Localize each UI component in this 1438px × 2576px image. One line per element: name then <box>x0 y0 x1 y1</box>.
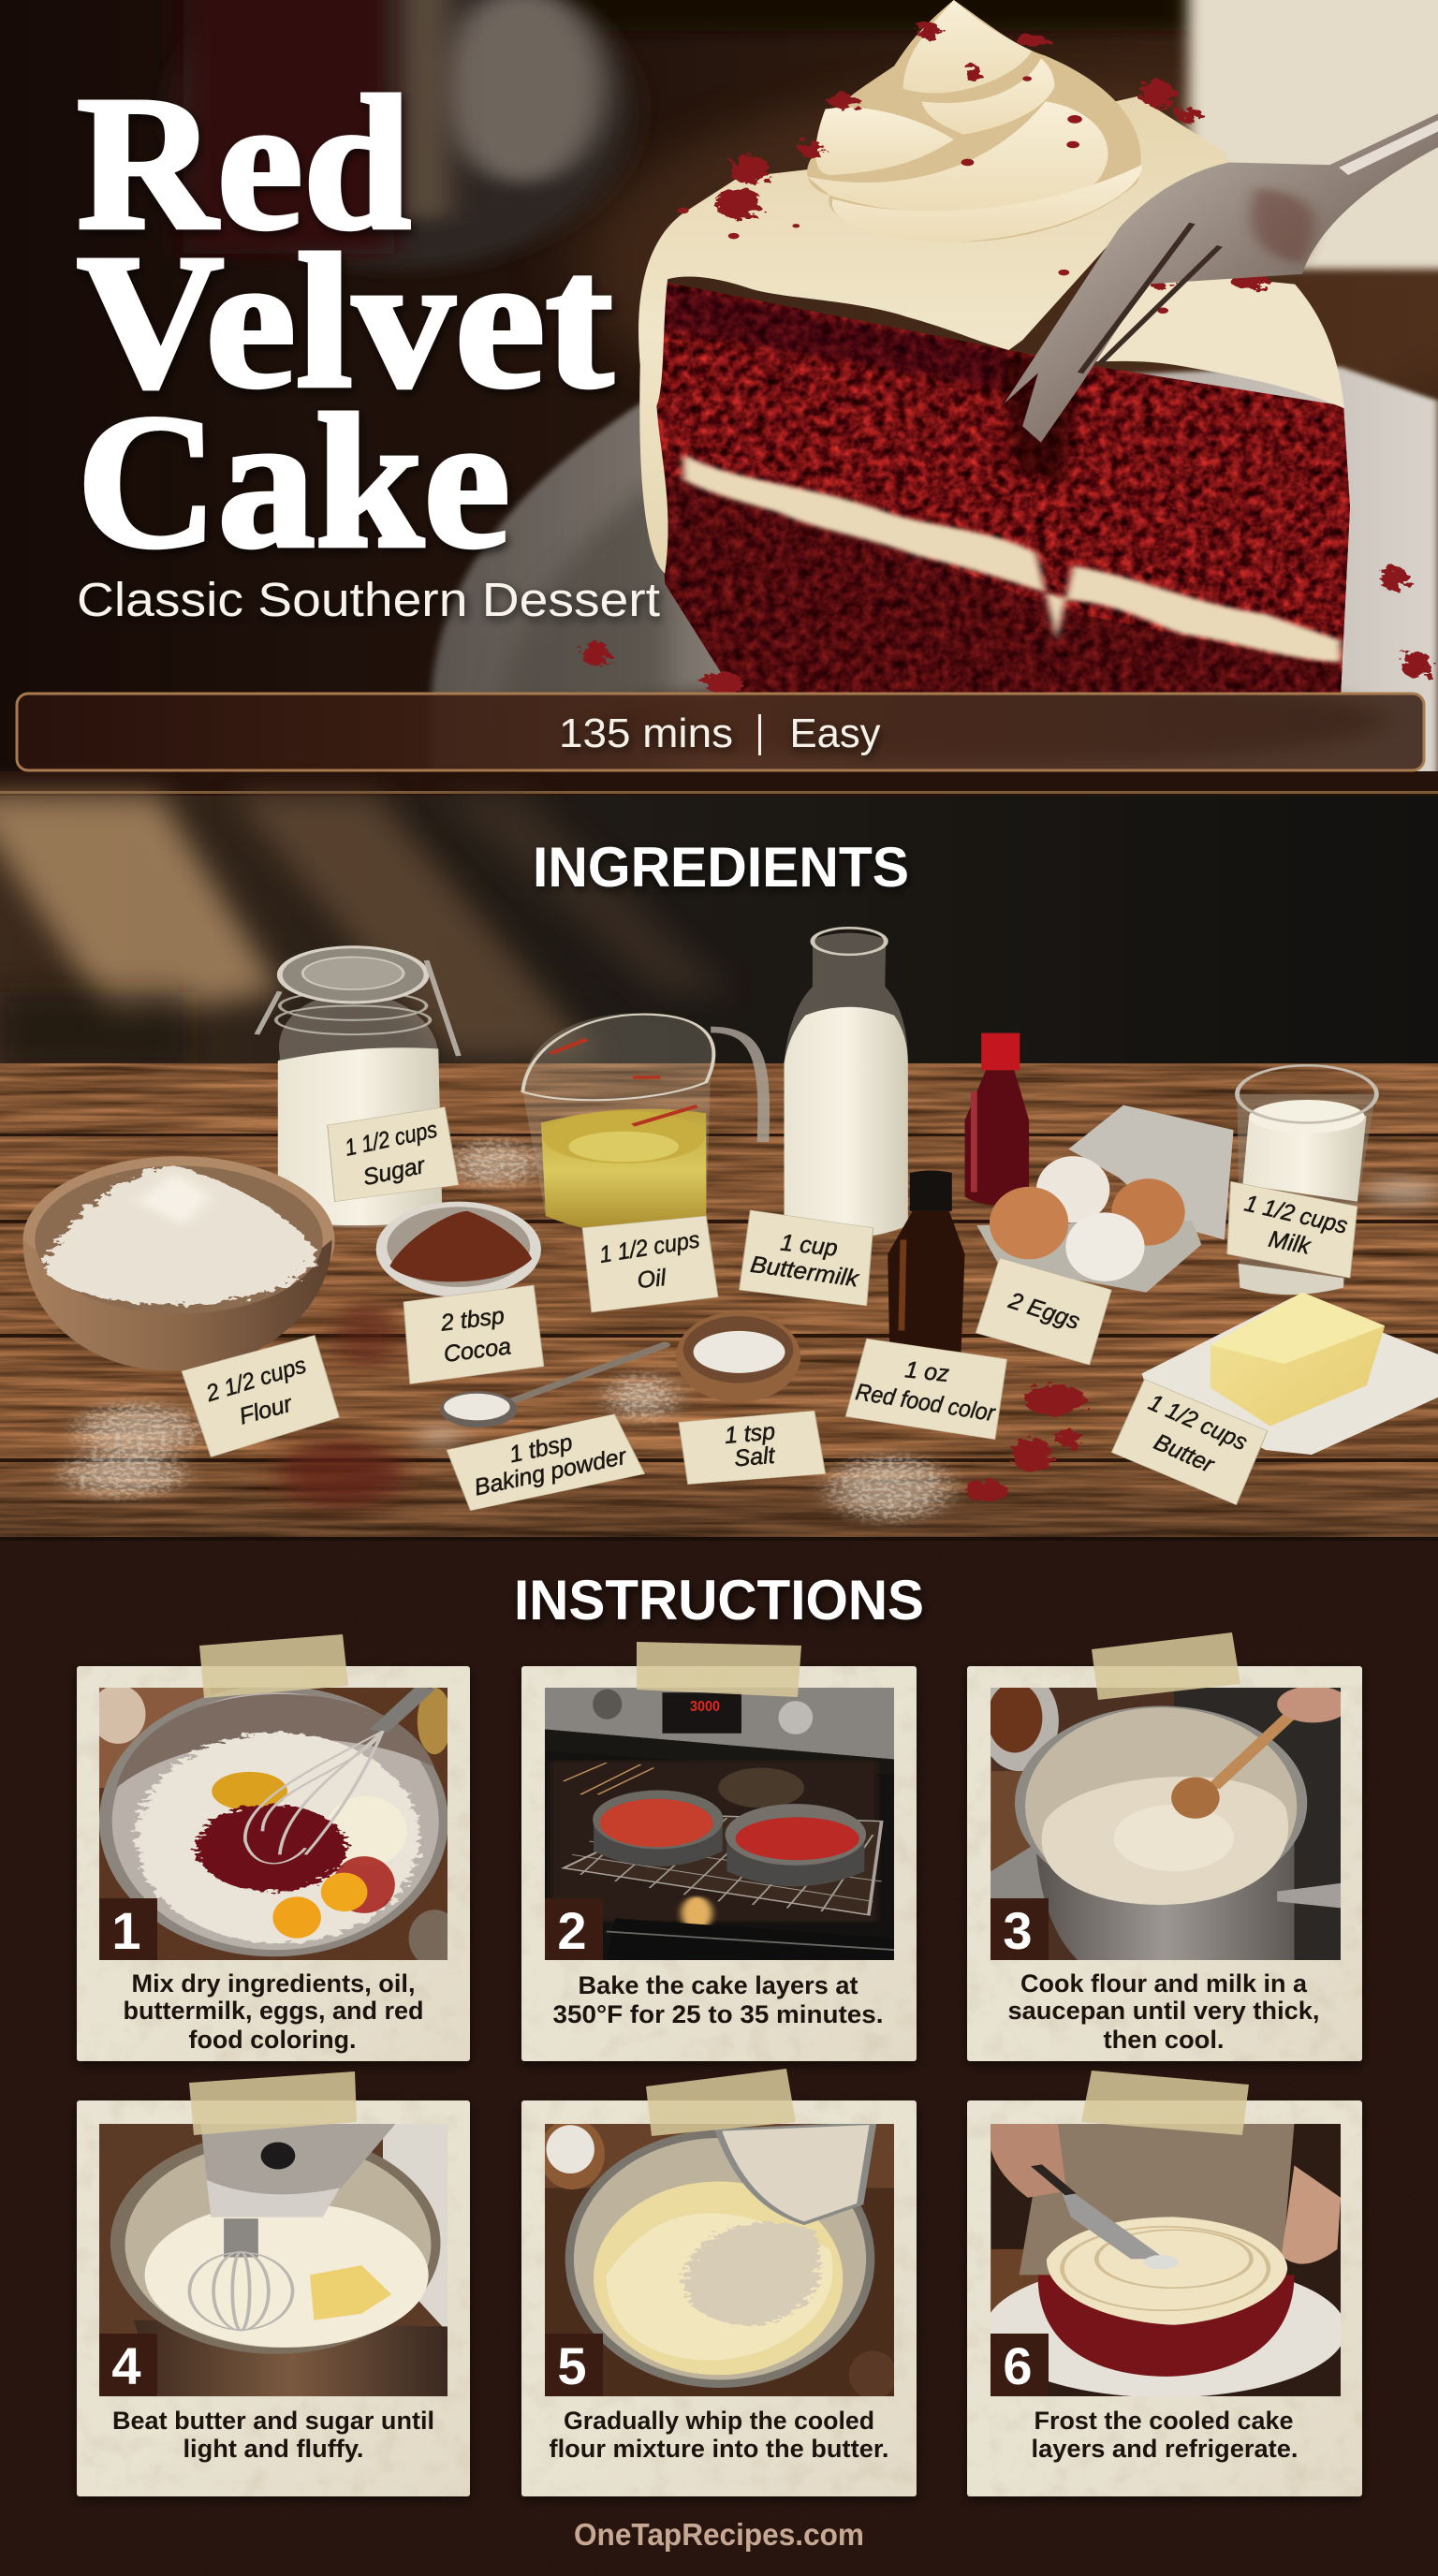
step text: saucepan until very thick, <box>1007 1997 1320 2025</box>
flour bowl <box>22 1156 335 1371</box>
step text <box>1007 1969 1320 2054</box>
egg carton <box>976 1105 1234 1293</box>
spills <box>60 1139 1438 1522</box>
label: oil <box>597 1226 701 1294</box>
step number 4: 4 <box>111 2336 141 2395</box>
frosting <box>638 96 1229 574</box>
step text: flour mixture into the butter. <box>549 2435 889 2463</box>
cocoa bowl <box>376 1202 541 1297</box>
tape <box>637 1642 801 1697</box>
subtitle: Classic Southern Dessert <box>77 573 660 626</box>
hero section <box>0 0 1438 797</box>
label: sugar <box>343 1117 440 1191</box>
label: milk: 1 1/2 cups <box>1242 1190 1350 1239</box>
card paper <box>77 1666 470 2061</box>
info bar: time and difficulty <box>17 694 1424 770</box>
step text: then cool. <box>1103 2026 1225 2054</box>
label: butter: 1 1/2 cups <box>1145 1389 1251 1456</box>
card paper <box>77 2100 470 2496</box>
photo: stand mixer <box>99 2124 448 2397</box>
step text: light and fluffy. <box>183 2435 363 2463</box>
step number 2 <box>545 1898 603 1960</box>
instructions heading: INSTRUCTIONS <box>514 1569 924 1632</box>
step 5 <box>521 2069 917 2496</box>
crumbs <box>581 22 1433 693</box>
photo: folding in flour <box>539 2118 897 2399</box>
label: red food color: Red food color <box>854 1379 998 1427</box>
step number 3: 3 <box>1003 1901 1033 1960</box>
step number 6 <box>990 2334 1049 2396</box>
label: red food color <box>854 1356 998 1427</box>
sugar jar <box>257 947 459 1228</box>
tape <box>1081 2071 1249 2135</box>
ingredient props <box>22 928 1438 1522</box>
step text: Gradually whip the cooled <box>564 2407 874 2435</box>
card paper <box>967 2100 1362 2496</box>
step 1 <box>77 1634 470 2061</box>
measuring cup with oil <box>522 1013 764 1233</box>
card paper <box>967 1666 1362 2061</box>
step text <box>552 1971 884 2028</box>
label: flour: Flour <box>237 1390 296 1430</box>
fork <box>1005 104 1438 443</box>
step text: Bake the cake layers at <box>579 1971 858 1999</box>
instructions section <box>0 1537 1438 2576</box>
step number 2: 2 <box>557 1901 587 1960</box>
spoon <box>440 1345 665 1427</box>
label: baking powder: 1 tbsp <box>506 1429 575 1468</box>
step text: Mix dry ingredients, oil, <box>131 1969 416 1998</box>
tape <box>199 1634 348 1698</box>
step text: Frost the cooled cake <box>1034 2407 1294 2435</box>
ingredients section <box>0 796 1438 1541</box>
step text: buttermilk, eggs, and red <box>124 1997 423 2025</box>
label: cocoa <box>438 1303 512 1368</box>
step text <box>124 1969 423 2054</box>
info bar: time and difficulty: 135 mins <box>559 710 733 756</box>
photo: frosting the cake <box>985 2124 1346 2397</box>
photo: oven <box>545 1688 895 1962</box>
step text: 350°F for 25 to 35 minutes. <box>552 2000 884 2028</box>
recipe title: Red <box>77 57 411 270</box>
step 6 <box>967 2071 1362 2496</box>
label: salt <box>724 1418 777 1471</box>
card paper <box>521 1666 917 2061</box>
milk bottle <box>785 928 908 1237</box>
info bar: time and difficulty: Easy <box>790 710 880 756</box>
step 3 <box>967 1632 1362 2061</box>
tape <box>646 2069 796 2136</box>
step 4 <box>77 2071 470 2496</box>
dark bottle <box>888 1171 965 1352</box>
step number 1 <box>99 1898 157 1960</box>
butter dish <box>1142 1293 1438 1455</box>
label cards <box>182 1107 1357 1511</box>
label: oil: 1 1/2 cups <box>597 1226 701 1268</box>
step text: layers and refrigerate. <box>1032 2435 1298 2463</box>
step text <box>1032 2407 1298 2463</box>
step number 4 <box>99 2334 157 2396</box>
salt bowl <box>676 1311 800 1402</box>
step number 1: 1 <box>111 1901 141 1960</box>
label: eggs: 2 Eggs <box>1005 1287 1083 1335</box>
tape <box>1092 1632 1240 1700</box>
step number 3 <box>990 1898 1049 1960</box>
label: flour: 2 1/2 cups <box>202 1352 309 1407</box>
hero photo: red velvet cake slice <box>0 0 1438 797</box>
recipe title: Cake <box>77 375 510 588</box>
step number 5: 5 <box>557 2336 587 2395</box>
swirl <box>807 0 1141 242</box>
label: buttermilk: 1 cup <box>779 1229 839 1262</box>
tape <box>189 2071 357 2135</box>
step text <box>549 2407 889 2463</box>
label: salt: 1 tsp <box>724 1418 776 1449</box>
label: milk: Milk <box>1267 1226 1313 1260</box>
oven timer display: 3000 <box>690 1699 720 1715</box>
wall backdrop <box>0 796 1438 1067</box>
label: sugar: 1 1/2 cups <box>343 1117 440 1162</box>
label: baking powder: Baking powder <box>472 1442 630 1500</box>
label: cocoa: 2 tbsp <box>438 1303 506 1337</box>
step text: Beat butter and sugar until <box>112 2407 434 2435</box>
recipe title: Velvet <box>77 215 613 428</box>
label: butter: Butter <box>1150 1428 1219 1479</box>
label: buttermilk: Buttermilk <box>749 1251 861 1293</box>
step number 5 <box>545 2334 603 2396</box>
recipe title <box>77 92 618 558</box>
step text: food coloring. <box>189 2026 356 2054</box>
card paper <box>521 2100 917 2496</box>
milk glass <box>1237 1065 1376 1295</box>
label: salt: Salt <box>733 1442 777 1471</box>
photo: saucepan <box>979 1671 1349 1962</box>
step number 6: 6 <box>1003 2336 1033 2395</box>
footer website: OneTapRecipes.com <box>574 2517 864 2552</box>
section background <box>0 1537 1438 2576</box>
photo: mixing bowl <box>91 1685 461 1967</box>
wooden table <box>0 1063 1438 1541</box>
step text <box>112 2407 434 2463</box>
label: oil: Oil <box>636 1265 668 1294</box>
label: cocoa: Cocoa <box>442 1333 512 1368</box>
sponge <box>642 274 1367 700</box>
label: buttermilk <box>749 1229 861 1293</box>
label: red food color: 1 oz <box>903 1356 951 1387</box>
label: sugar: Sugar <box>360 1152 429 1191</box>
ingredients heading: INGREDIENTS <box>533 836 909 899</box>
step text: Cook flour and milk in a <box>1020 1969 1308 1998</box>
red food colour bottle <box>965 1033 1029 1205</box>
step 2 <box>521 1642 917 2061</box>
label: flour <box>202 1352 309 1430</box>
filling <box>683 454 1341 662</box>
